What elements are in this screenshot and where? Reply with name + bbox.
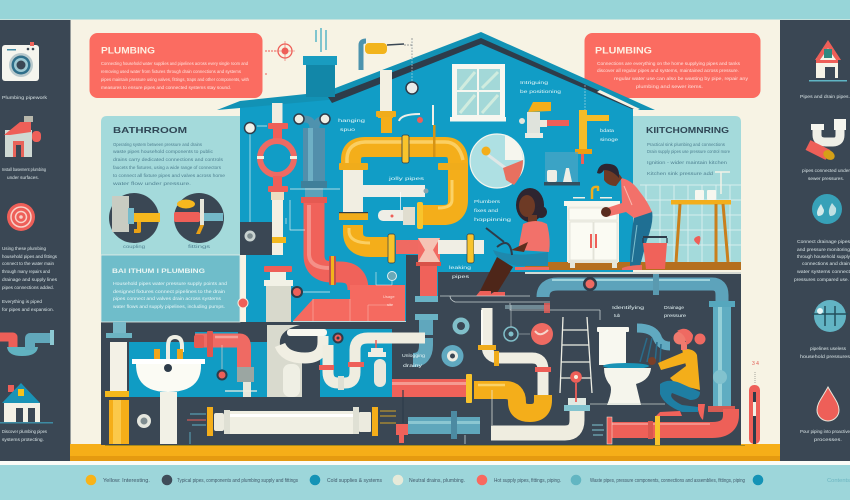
text block: Connect drainage pipes <box>797 239 850 244</box>
coral steps <box>293 272 406 322</box>
caption <box>800 429 850 442</box>
table <box>671 190 731 262</box>
body text: removing used water from fixtures through drain connections and systems <box>101 69 242 74</box>
label <box>449 265 472 279</box>
caption <box>2 429 48 442</box>
coral steps: site <box>387 302 394 307</box>
text block: pressures compared use. <box>794 277 849 282</box>
label: tub <box>614 313 620 318</box>
legend bar <box>0 461 850 500</box>
label: leaking <box>449 265 472 270</box>
icon: coral target with dashed line <box>265 41 295 74</box>
pipe: white sink trap <box>319 332 425 390</box>
label: fixes and <box>474 208 499 213</box>
icon: washing machine <box>2 42 39 81</box>
body text <box>647 142 730 176</box>
body text: Connections are everything on the home supplying pipes and tanks <box>597 61 741 66</box>
icon: trap pipe <box>808 119 846 162</box>
body text: discover all regular pipes and systems, maintained across pressure. <box>597 68 739 73</box>
pipe: yellow stand <box>575 85 609 164</box>
floor <box>525 262 741 270</box>
discs <box>442 305 553 367</box>
label <box>474 199 512 222</box>
icon: teal pipes circle <box>812 300 848 332</box>
icon: teal water drops <box>812 194 842 224</box>
label: drainy <box>403 363 423 368</box>
body text: measures to ensure pipes and connected systems stay sound. <box>101 85 231 90</box>
heading panel: plumbing left <box>90 33 262 98</box>
text block: drainage and supply lines <box>2 277 58 282</box>
icon: drain pipe <box>0 330 54 356</box>
leader lines <box>286 189 340 230</box>
pipe: basement left connectors <box>413 296 600 360</box>
heading: KIITCHOMNRING <box>646 125 729 135</box>
icon: valve joint <box>174 193 224 243</box>
person: woman sitting <box>476 188 550 296</box>
label <box>600 128 619 142</box>
house: blue walls <box>240 36 633 322</box>
bucket <box>643 236 667 269</box>
icon: red barn house <box>809 40 847 82</box>
pipe: long white horizontal <box>187 407 396 444</box>
blue area behind sink <box>129 332 267 397</box>
pipe: white bottom <box>491 390 590 433</box>
legend bar: Neutral drains, plumbing. <box>409 478 465 484</box>
caption: under surfaces. <box>7 175 39 180</box>
person: woman with bun <box>648 329 706 420</box>
pipe: coral and yellow basement <box>392 374 552 413</box>
label: Intriguing <box>520 80 549 85</box>
left side panel <box>0 20 70 461</box>
legend bar: Typical pipes, components and plumbing supply and fittings <box>177 478 298 484</box>
label: hanging <box>338 118 366 123</box>
caption: pipelines useless <box>810 346 847 351</box>
callout: hand with wrench <box>470 134 524 188</box>
text block: connections and drain <box>802 261 850 266</box>
captions: coupling <box>123 244 146 249</box>
cream toilet back <box>267 325 392 397</box>
legend bar: Cold supplies & systems <box>327 478 382 484</box>
label: be positioning <box>520 89 562 94</box>
small taps <box>715 172 730 194</box>
body text: Connecting household water supplies and pipelines across every single room and <box>101 61 248 66</box>
caption: household pressures <box>800 354 850 359</box>
icon: target <box>7 203 35 231</box>
label: Drainage <box>664 305 684 310</box>
floor band <box>70 444 780 461</box>
text block: through household supply <box>797 254 850 259</box>
captions <box>123 244 211 249</box>
body text: pipes connect and valves drain across systems <box>113 296 222 301</box>
text block: for pipes and expansion. <box>2 307 54 312</box>
body text: Household pipes water pressure supply points and <box>113 281 227 286</box>
pipe: white basement trap <box>478 308 551 395</box>
sink <box>132 337 205 444</box>
toilet <box>590 327 665 405</box>
steam <box>316 28 326 52</box>
window <box>450 64 506 122</box>
heading panel: plumbing right <box>584 33 760 98</box>
pipe: big yellow loop <box>339 70 467 247</box>
label: spuo <box>340 127 356 132</box>
panel: kitchen wall <box>633 116 741 262</box>
chimney <box>303 56 337 97</box>
pipe: white verticals <box>339 170 428 229</box>
pipe: basement blue top <box>543 274 735 412</box>
body text: to connect all fixture pipes and valves across home <box>113 173 225 178</box>
thermometer pipe <box>749 361 760 444</box>
legend bar: Yellow: Interesting. <box>103 478 150 484</box>
pipe: coral over sink <box>194 331 257 397</box>
right side panel <box>780 20 850 461</box>
body text: drains carry dedicated connections and controls <box>113 157 224 162</box>
pipe: coral elbow <box>301 197 358 290</box>
heading: BAI ITHUM I PLUMBING <box>112 268 205 275</box>
label: Identifying <box>612 305 645 310</box>
panel: bathroom plumbing <box>101 255 248 322</box>
person: man at sink <box>597 164 652 270</box>
text block: and pressure monitoring <box>797 247 850 252</box>
body text: plumbing and sewer items. <box>636 84 703 89</box>
body text <box>113 142 225 186</box>
icon: white pipe joint <box>109 193 160 243</box>
heading: BATHRROOM <box>113 125 187 135</box>
body text: pipes maintain pressure using valves, fittings, traps and other components, with <box>101 77 249 82</box>
body text <box>101 61 249 90</box>
text block: through many repairs and <box>2 269 50 274</box>
captions: fittings <box>188 244 211 249</box>
caption: Plumbing pipework <box>2 95 48 100</box>
text block: household pipes and fittings <box>2 254 58 259</box>
caption: Discover plumbing pipes <box>2 429 48 434</box>
dark box with gauge <box>240 222 272 255</box>
label <box>338 118 366 132</box>
valve dot <box>238 298 248 308</box>
legend bar: Waste pipes, pressure components, connections and assemblies, fittings, piping <box>590 478 745 484</box>
legend bar: Contents <box>827 478 850 484</box>
label: sinoge <box>600 137 619 142</box>
label: jolly pipes <box>387 176 425 181</box>
text block: connect to the water main <box>2 261 54 266</box>
body text: Kitchen sink pressure add <box>647 171 714 176</box>
legend bar: Hot supply pipes, fittings, piping. <box>494 478 561 484</box>
label <box>402 353 425 368</box>
body text: faucets the fixtures, using a wide range of connectors <box>113 165 222 170</box>
heading: PLUMBING <box>595 46 652 56</box>
shelf with jars <box>544 152 580 186</box>
caption: processes. <box>814 437 842 442</box>
caption <box>2 167 46 180</box>
pipe: coral ring with white riser <box>257 103 297 255</box>
gauge and tap top centre <box>399 40 433 125</box>
label <box>664 305 687 318</box>
label <box>520 80 562 94</box>
pipe: coral middle <box>388 234 484 300</box>
caption: Pipes and drain pipes. <box>800 94 850 99</box>
caption: pipes connected under <box>802 168 850 173</box>
body text: Practical sink plumbing and connections <box>647 142 726 147</box>
label: pipes <box>452 274 470 279</box>
body text: waste pipes household components to public <box>113 149 214 154</box>
caption: Install basement plumbing <box>2 167 46 172</box>
pipe: coral bottom right <box>592 409 731 445</box>
body text <box>597 61 749 89</box>
coral steps: Usage <box>383 294 395 299</box>
thermometer pipe: 3 4 <box>752 361 759 367</box>
icon: small house <box>0 383 53 424</box>
icon: red drop <box>817 387 839 421</box>
label: hoppinning <box>474 217 512 222</box>
text block: pipes connections added. <box>2 285 54 290</box>
label <box>612 305 645 318</box>
gauge: white dial top left <box>244 122 267 222</box>
pipe: steel blue T <box>294 114 330 197</box>
caption: sewer pressures. <box>808 176 844 181</box>
text block: water systems connect <box>797 269 850 274</box>
body text: regular water use can also be wasting by pipe, repair any <box>614 76 749 81</box>
body text <box>113 281 227 309</box>
body text: water flow under pressure. <box>113 181 191 186</box>
caption <box>800 346 850 359</box>
body text: water flows and supply pipelines, including pumps. <box>113 304 225 309</box>
text block <box>794 239 850 282</box>
body text: designed fixtures connect pipelines to the drain <box>113 289 226 294</box>
body text: Drain supply pipes use pressure control more <box>647 149 730 154</box>
body text: Operating system between pressure and drains <box>113 142 203 147</box>
pipe: blue lower <box>408 411 480 444</box>
label: bdata <box>600 128 615 133</box>
caption <box>802 168 850 181</box>
vanity <box>564 187 620 268</box>
text block: Everything is piped <box>2 299 42 304</box>
label: Unlogging <box>402 353 425 358</box>
fitting: white upper <box>264 266 330 322</box>
text block <box>2 246 58 312</box>
small dial <box>137 414 151 428</box>
spout with water <box>637 328 670 362</box>
text block: Using these plumbing <box>2 246 46 251</box>
valve: white stand <box>368 340 386 387</box>
column: left basement <box>105 322 133 444</box>
tiles <box>640 185 741 262</box>
icon: yellow valve <box>361 38 412 70</box>
fitting: coral small <box>396 390 408 443</box>
label: Plumbers <box>474 199 501 204</box>
top band <box>0 0 850 20</box>
heading: PLUMBING <box>101 46 155 56</box>
ladder <box>560 317 592 393</box>
faucet <box>519 102 569 138</box>
panel: bathroom <box>101 116 240 255</box>
label: pressure <box>664 313 687 318</box>
caption: systems protecting. <box>2 437 44 442</box>
dark basement <box>101 255 741 445</box>
gauge: coral on ladder <box>570 371 582 402</box>
roof <box>217 32 655 110</box>
body text: Ignition - wider maintain kitchen <box>647 160 728 165</box>
icon: house with red roof <box>4 116 41 157</box>
